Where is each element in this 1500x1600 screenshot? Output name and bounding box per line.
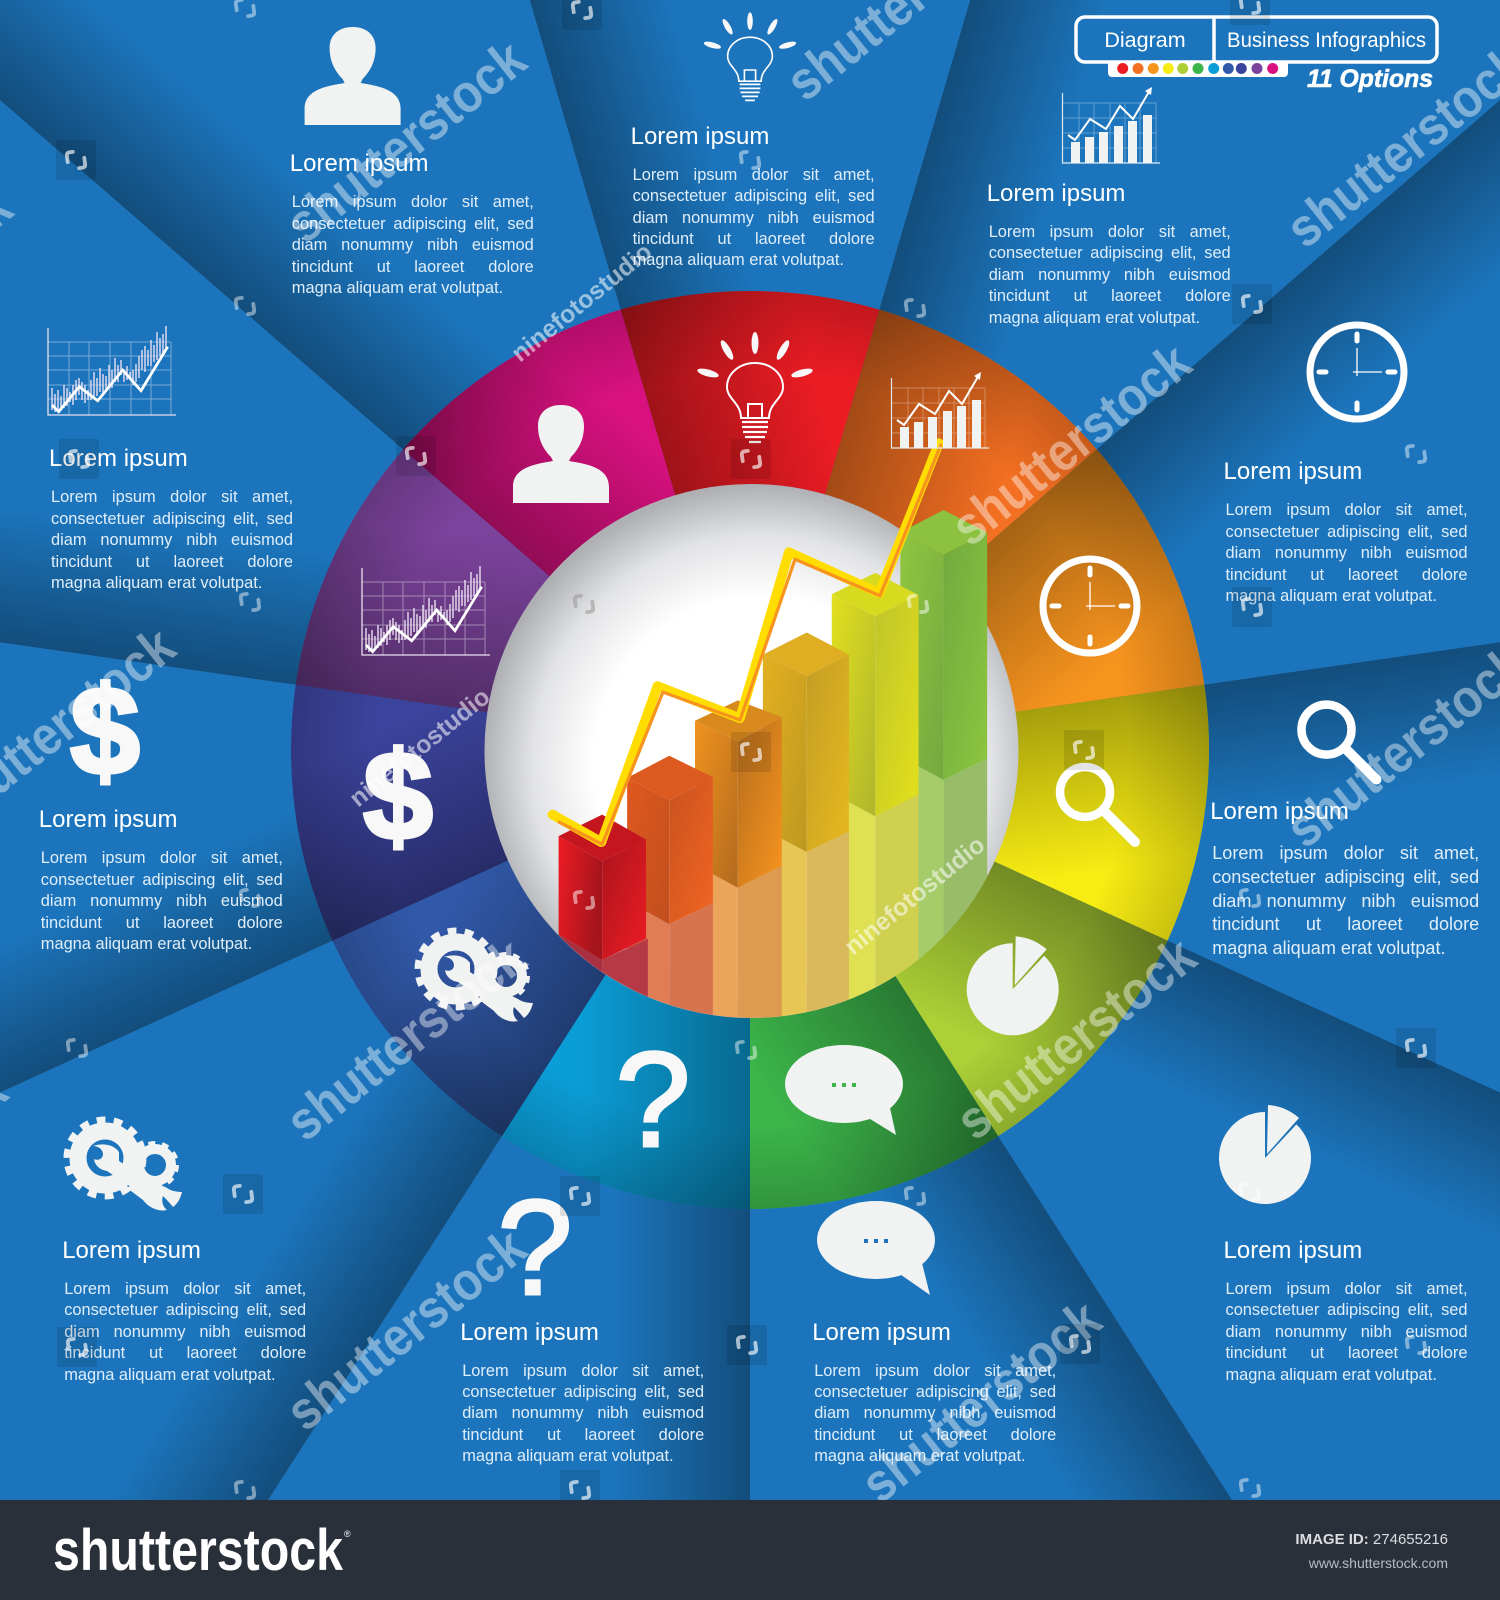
text block: line chart	[49, 445, 293, 592]
icon: light bulb	[703, 12, 797, 100]
bar reflections	[559, 757, 987, 1041]
body text	[814, 1362, 1056, 1465]
icon: speech bubble	[817, 1201, 935, 1295]
body text: consectetuer adipiscing elit, sed	[1226, 523, 1468, 541]
text block: light bulb	[631, 123, 875, 269]
yellow bar	[832, 573, 919, 816]
body text: Lorem ipsum dolor sit amet,	[292, 193, 534, 211]
body text: magna aliquam erat volutpat.	[989, 309, 1200, 327]
body text: diam nonummy nibh euismod	[1226, 544, 1468, 562]
body text: consectetuer adipiscing elit, sed	[51, 510, 293, 528]
text block: dollar	[39, 806, 283, 953]
icon: question mark on ring: ?	[615, 1024, 691, 1175]
body text: Lorem ipsum dolor sit amet,	[1212, 843, 1479, 863]
icon: dollar on ring: $	[363, 727, 433, 866]
body text: Lorem ipsum dolor sit amet,	[64, 1280, 306, 1298]
body text: diam nonummy nibh euismod	[51, 531, 293, 549]
body text: tincidunt ut laoreet dolore	[51, 552, 293, 570]
body text: Lorem ipsum dolor sit amet,	[1226, 501, 1468, 519]
body text: magna aliquam erat volutpat.	[41, 935, 252, 953]
header badge: diagram, business infographics, 11 options: Business Infographics	[1227, 29, 1426, 52]
watermark: ninefotostudio text: ninefotostudio	[839, 831, 990, 961]
body text: magna aliquam erat volutpat.	[1226, 587, 1437, 605]
icon: magnifier on ring	[1060, 767, 1135, 842]
red bar	[559, 815, 646, 960]
gold bar	[763, 632, 849, 852]
body text: diam nonummy nibh euismod	[814, 1404, 1056, 1422]
icon: magnifier	[1302, 705, 1376, 780]
text block: question mark	[460, 1319, 704, 1465]
body text	[41, 849, 283, 953]
header badge: diagram, business infographics, 11 options: 11 Options	[1307, 65, 1433, 93]
body text: consectetuer adipiscing elit, sed	[462, 1383, 704, 1401]
watermark: ninefotostudio text: ninefotostudio	[344, 683, 495, 813]
icon: bar chart on ring	[892, 372, 989, 448]
body text: tincidunt ut laoreet dolore	[1226, 1344, 1468, 1362]
red-orange bar	[627, 756, 713, 924]
body text: diam nonummy nibh euismod	[64, 1323, 306, 1341]
body text: consectetuer adipiscing elit, sed	[633, 187, 875, 205]
icon: dollar: $	[70, 662, 140, 801]
footer url: www.shutterstock.com	[1308, 1555, 1448, 1571]
body text: diam nonummy nibh euismod	[292, 236, 534, 254]
body text: Lorem ipsum dolor sit amet,	[51, 488, 293, 506]
body text: diam nonummy nibh euismod	[1212, 891, 1479, 911]
body text: tincidunt ut laoreet dolore	[1212, 914, 1479, 934]
heading: Lorem ipsum	[49, 445, 188, 472]
body text: magna aliquam erat volutpat.	[292, 279, 503, 297]
rising yellow line	[552, 443, 941, 844]
centre sphere	[484, 484, 1018, 1018]
body text: magna aliquam erat volutpat.	[633, 251, 844, 269]
body text	[64, 1280, 306, 1384]
body text	[1226, 501, 1468, 605]
heading: Lorem ipsum	[1224, 1237, 1362, 1264]
icon: pie chart on ring	[967, 936, 1059, 1035]
text block: gears	[62, 1237, 306, 1384]
heading: Lorem ipsum	[62, 1237, 201, 1264]
icon: speech bubble on ring	[785, 1045, 903, 1135]
body text: diam nonummy nibh euismod	[41, 892, 283, 910]
body text: consectetuer adipiscing elit, sed	[814, 1383, 1056, 1401]
body text	[1212, 843, 1479, 958]
body text: consectetuer adipiscing elit, sed	[41, 871, 283, 889]
body text: consectetuer adipiscing elit, sed	[1226, 1301, 1468, 1319]
icon: light bulb on ring	[696, 332, 814, 442]
header badge: diagram, business infographics, 11 options: Diagram	[1104, 28, 1186, 52]
body text: magna aliquam erat volutpat.	[462, 1447, 674, 1465]
icon: clock	[1310, 325, 1404, 419]
watermark: ninefotostudio text	[344, 238, 990, 961]
body text: Lorem ipsum dolor sit amet,	[1226, 1280, 1468, 1298]
icon: question mark: ?	[497, 1172, 573, 1323]
body text: diam nonummy nibh euismod	[462, 1404, 704, 1422]
text block: pie chart	[1224, 1237, 1468, 1384]
body text: magna aliquam erat volutpat.	[1226, 1366, 1437, 1384]
watermark: shutterstock text: shutterstock	[850, 1288, 1113, 1514]
body text	[632, 166, 875, 269]
footer image id: IMAGE ID: 274655216	[1295, 1531, 1448, 1548]
watermark: shutterstock text: shutterstock	[945, 925, 1208, 1151]
green bar	[900, 510, 987, 780]
body text: consectetuer adipiscing elit, sed	[989, 244, 1231, 262]
body text: Lorem ipsum dolor sit amet,	[989, 223, 1231, 241]
body text: tincidunt ut laoreet dolore	[633, 230, 875, 248]
body text: tincidunt ut laoreet dolore	[814, 1426, 1056, 1444]
body text: Lorem ipsum dolor sit amet,	[462, 1362, 704, 1380]
icon: line chart	[48, 326, 176, 415]
heading: Lorem ipsum	[987, 180, 1125, 207]
body text: consectetuer adipiscing elit, sed	[64, 1301, 306, 1319]
colour wheel ring with 11 segments	[291, 291, 1209, 1209]
heading: Lorem ipsum	[290, 150, 429, 177]
watermark: ninefotostudio text: ninefotostudio	[506, 238, 657, 368]
body text: consectetuer adipiscing elit, sed	[1212, 867, 1479, 887]
header badge: diagram, business infographics, 11 options	[1076, 17, 1437, 93]
body text	[1226, 1280, 1468, 1384]
icon: gears on ring	[419, 932, 533, 1022]
text block: speech bubble	[812, 1319, 1056, 1465]
footer bar	[0, 1500, 1500, 1600]
body text	[292, 193, 534, 297]
text block: magnifier	[1210, 798, 1479, 958]
body text: diam nonummy nibh euismod	[633, 209, 875, 227]
body text: tincidunt ut laoreet dolore	[1226, 566, 1468, 584]
body text: consectetuer adipiscing elit, sed	[292, 215, 534, 233]
text block: bar chart	[987, 180, 1231, 327]
body text: tincidunt ut laoreet dolore	[462, 1426, 704, 1444]
3D bar chart with reflection and rising line	[552, 443, 987, 1041]
heading: Lorem ipsum	[1210, 798, 1349, 825]
heading: Lorem ipsum	[460, 1319, 599, 1346]
heading: Lorem ipsum	[631, 123, 769, 150]
body text	[51, 488, 293, 592]
watermark: shutterstock text: shutterstock	[275, 1216, 538, 1442]
icon: line chart on ring	[362, 566, 490, 655]
watermark: shutterstock text: shutterstock	[275, 28, 538, 254]
footer bar: ®	[344, 1529, 351, 1539]
body text: tincidunt ut laoreet dolore	[64, 1344, 306, 1362]
body text: Lorem ipsum dolor sit amet,	[814, 1362, 1056, 1380]
icon: gears	[68, 1121, 182, 1211]
body text: tincidunt ut laoreet dolore	[989, 287, 1231, 305]
watermark: shutterstock text: shutterstock	[940, 331, 1203, 557]
body text: tincidunt ut laoreet dolore	[41, 914, 283, 932]
body text	[462, 1362, 704, 1465]
heading: Lorem ipsum	[1224, 458, 1362, 485]
icon: person	[305, 27, 401, 125]
text block: clock	[1224, 458, 1468, 605]
body text: Lorem ipsum dolor sit amet,	[633, 166, 875, 184]
icon: pie chart	[1219, 1105, 1311, 1204]
body text: magna aliquam erat volutpat.	[1212, 938, 1446, 958]
icon: clock on ring	[1043, 559, 1137, 653]
body text: magna aliquam erat volutpat.	[814, 1447, 1026, 1465]
footer logo: shutterstock	[53, 1518, 344, 1583]
icon: person on ring	[513, 405, 609, 503]
body text: magna aliquam erat volutpat.	[51, 574, 262, 592]
body text	[989, 223, 1231, 327]
body text: diam nonummy nibh euismod	[1226, 1323, 1468, 1341]
body text: diam nonummy nibh euismod	[989, 266, 1231, 284]
watermark: shutterstock text: shutterstock	[275, 926, 538, 1152]
body text: tincidunt ut laoreet dolore	[292, 258, 534, 276]
body text: magna aliquam erat volutpat.	[64, 1366, 276, 1384]
body text: Lorem ipsum dolor sit amet,	[41, 849, 283, 867]
heading: Lorem ipsum	[812, 1319, 951, 1346]
icon: bar chart	[1062, 87, 1160, 163]
text block: person	[290, 150, 534, 297]
heading: Lorem ipsum	[39, 806, 178, 833]
orange bar	[695, 700, 782, 888]
